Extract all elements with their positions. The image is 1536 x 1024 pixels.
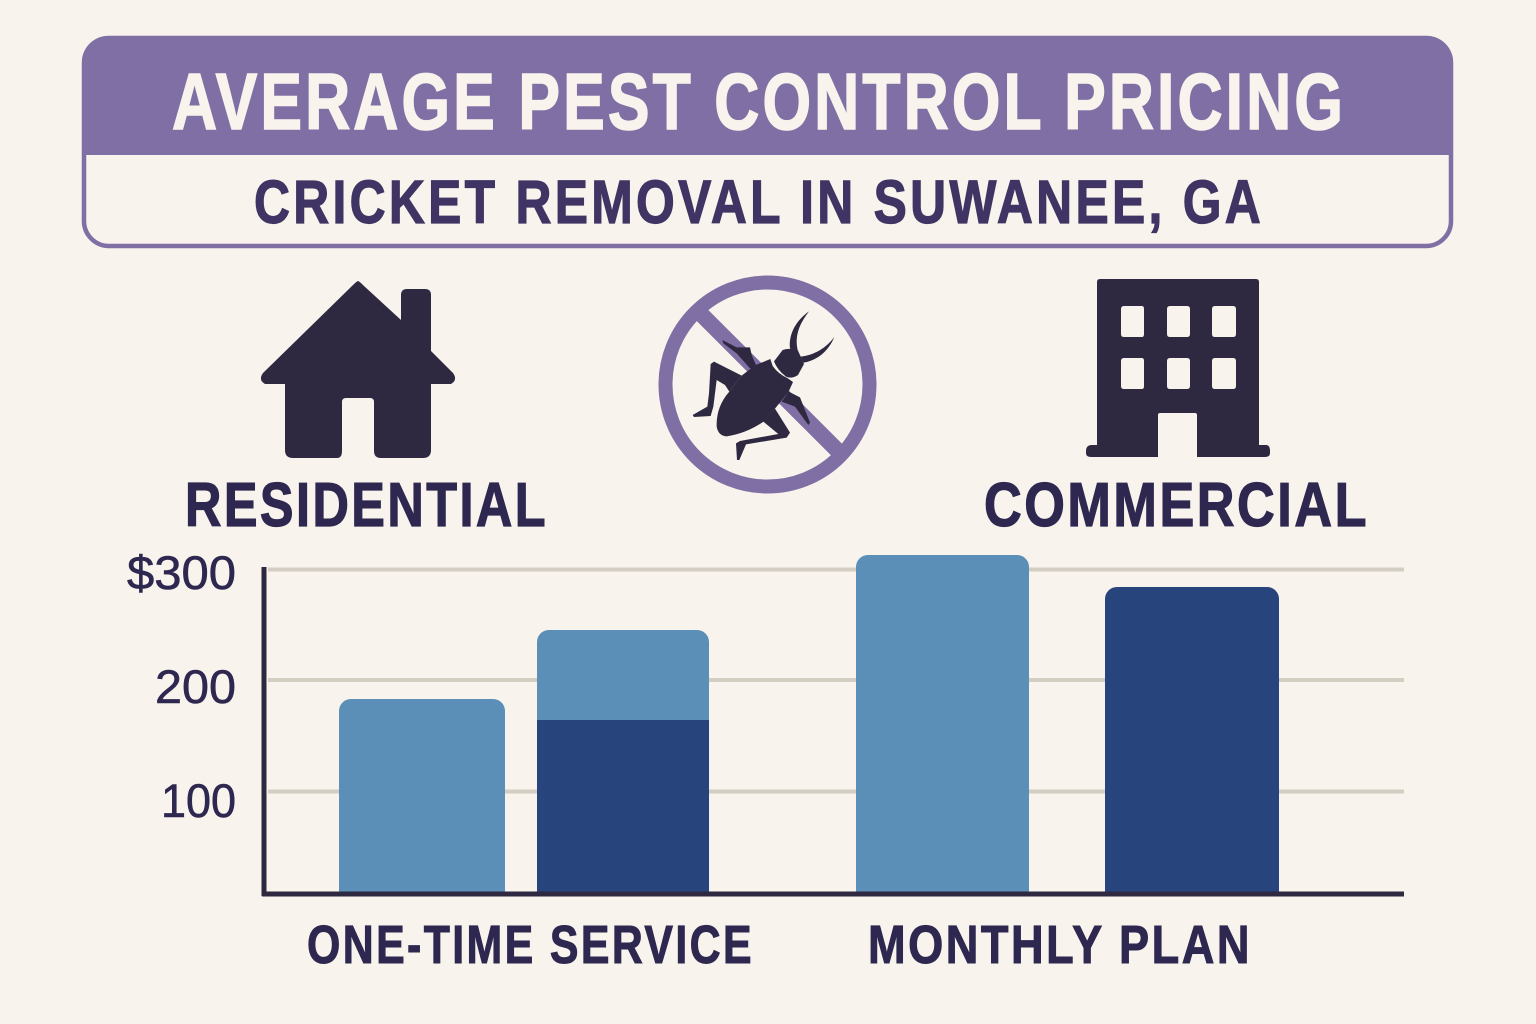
title band bbox=[82, 36, 1453, 155]
commercial heading: COMMERCIAL bbox=[984, 471, 1369, 540]
y-axis labels bbox=[127, 546, 236, 827]
head bbox=[774, 349, 804, 378]
residential heading: RESIDENTIAL bbox=[185, 471, 548, 540]
bar: one-time residential bbox=[339, 699, 505, 892]
icon: office building bbox=[1086, 279, 1270, 457]
icon: no crickets sign bbox=[666, 282, 870, 486]
bar chart bbox=[127, 546, 1404, 896]
antennae bbox=[790, 311, 809, 351]
prohibition ring and slash bbox=[666, 282, 870, 486]
bar: one-time commercial stacked bbox=[537, 630, 709, 892]
bar: monthly commercial bbox=[1105, 587, 1279, 892]
axes bbox=[262, 567, 1404, 896]
icon: house bbox=[261, 281, 455, 458]
icon: cricket silhouette bbox=[693, 311, 834, 460]
y-axis labels: 200 bbox=[155, 660, 236, 713]
x-axis label: one-time service: ONE-TIME SERVICE bbox=[307, 915, 754, 975]
subtitle: CRICKET REMOVAL IN SUWANEE, GA bbox=[254, 168, 1264, 236]
x-axis label: monthly plan: MONTHLY PLAN bbox=[868, 915, 1252, 975]
header banner bbox=[82, 36, 1453, 246]
y-axis labels: $300 bbox=[127, 546, 236, 599]
legs bbox=[693, 362, 742, 417]
y-axis labels: 100 bbox=[161, 774, 236, 827]
body bbox=[717, 359, 793, 436]
bar: monthly residential bbox=[856, 555, 1029, 892]
